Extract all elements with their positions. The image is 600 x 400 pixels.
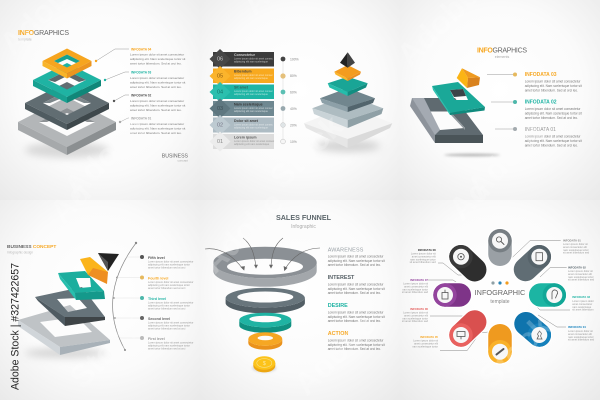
panel: step list and pyramid [210, 49, 392, 152]
layered pyramid [304, 52, 392, 152]
percent timeline: 80% [290, 74, 297, 78]
label: infodata 05 [412, 335, 438, 348]
callout: infodata 04: amet tortor bibendum. Sed at orci leo. [130, 61, 182, 65]
callout: infodata 02: amet tortor bibendum. Sed at orci leo. [525, 116, 578, 120]
label: infodata 04: INFODATA 04 [568, 325, 586, 329]
stage: action: ACTION [328, 331, 348, 337]
label: infodata 06: amet consectetur elit [404, 313, 428, 317]
label: infodata 01: INFODATA 01 [563, 238, 581, 242]
number diamonds: 06 [217, 56, 223, 62]
step rows: Nam scelerisque [234, 102, 263, 106]
panel: floating frames infographic [410, 48, 582, 156]
level: fifth: adipiscing elit nam scelerisque tortor [148, 262, 190, 266]
stock watermark: Adobe [459, 109, 555, 205]
callout: infodata 02: adipiscing elit. Nam scelerisque tortor sit [130, 103, 186, 107]
label: infodata 03: sit amet bibendum [572, 308, 594, 312]
stage: interest: adipiscing elit. Nam scelerisque tortor sit [328, 287, 385, 291]
percent timeline: 20% [290, 124, 297, 128]
label: infodata 04: Lorem ipsum dolor sit [568, 329, 593, 333]
label: infodata 01: nam scelerisque tortor [563, 248, 589, 252]
level: fourth: adipiscing elit nam scelerisque tortor [148, 283, 190, 287]
step rows: adipiscing elit nam scelerisque [234, 142, 270, 146]
level: fifth: amet tortor bibendum sed at orci [148, 266, 186, 270]
label: infodata 07: Lorem ipsum dolor sit [403, 282, 428, 286]
callout: infodata 01: amet tortor bibendum. Sed at orci leo. [525, 144, 578, 148]
step rows: Sit amet [234, 86, 249, 90]
callout: infodata 02: Lorem ipsum dolor sit amet consectetur [130, 99, 184, 103]
stage: interest: INTEREST [328, 275, 355, 281]
label: infodata 02: amet consectetur elit [568, 272, 592, 276]
level: second: amet tortor bibendum sed at orci [148, 326, 186, 330]
callout: infodata 03: INFODATA 03 [525, 72, 557, 78]
level: fifth [126, 255, 194, 270]
step rows: adipiscing elit nam scelerisque [234, 60, 269, 63]
stock watermark: Adobe [56, 109, 152, 205]
cylinder: top right slate [526, 245, 551, 270]
stage: interest [328, 275, 385, 295]
stage: interest: amet tortor bibendum. Sed at orci leo. [328, 291, 381, 295]
center title [475, 281, 525, 305]
icon: coin [252, 356, 276, 372]
step rows: Lorem ipsum dolor sit amet consec [234, 90, 274, 93]
level: fourth: amet tortor bibendum sed at orci [148, 286, 186, 290]
level: first: First level [148, 337, 165, 341]
callout: infodata 01: Lorem ipsum dolor sit amet consectetur [130, 122, 184, 126]
level: fifth: Fifth level [148, 256, 165, 260]
label: infodata 02: Lorem ipsum dolor sit [568, 269, 593, 273]
step rows: Lorem ipsum dolor sit amet consec [234, 74, 274, 77]
label: infodata 08: sit amet bibendum sed [410, 260, 436, 264]
callout: infodata 02: INFODATA 02 [131, 94, 152, 98]
exploded isometric frames [18, 253, 119, 358]
label: infodata 06: nam scelerisque tortor [402, 316, 428, 320]
center title: template [490, 299, 510, 305]
label: infodata 01: Lorem ipsum dolor sit [563, 242, 588, 246]
level: third: Lorem ipsum dolor sit amet consectetur [148, 300, 194, 304]
label: infodata 07 [402, 278, 429, 294]
title: Infographic [291, 224, 316, 230]
title: BUSINESS CONCEPT [7, 244, 56, 250]
label: infodata 05: INFODATA 05 [420, 335, 438, 339]
stage: desire [328, 303, 385, 323]
stage: awareness [328, 248, 385, 267]
number diamonds: 03 [217, 106, 223, 112]
business concept caption: BUSINESS [162, 154, 189, 160]
callout: infodata 04 [95, 48, 186, 65]
label: infodata 02: INFODATA 02 [568, 266, 586, 270]
stage: awareness: Lorem ipsum dolor sit amet consectetur [328, 254, 384, 258]
title [18, 30, 69, 42]
stage: interest: Lorem ipsum dolor sit amet consectetur [328, 282, 384, 286]
label: infodata 03: Lorem ipsum dolor [572, 299, 594, 303]
isometric frames and cube [410, 68, 500, 156]
stage: desire: Lorem ipsum dolor sit amet consectetur [328, 310, 384, 314]
level: fifth: Lorem ipsum dolor sit amet consectetur [148, 260, 194, 264]
label: infodata 06 [402, 307, 429, 323]
cylinder: bottom right blue [526, 323, 551, 347]
step rows [213, 52, 275, 149]
label: infodata 05: nam scelerisque tortor [412, 344, 438, 348]
label: infodata 03: INFODATA 03 [572, 295, 591, 299]
cylinder: right teal [541, 283, 566, 307]
callout: infodata 03: Lorem ipsum dolor sit amet consectetur [130, 76, 184, 80]
label: infodata 08: nam scelerisque tortor [410, 257, 436, 261]
callout: infodata 03: amet tortor bibendum. Sed at orci leo. [130, 85, 182, 89]
step rows: adipiscing elit nam scelerisque [234, 110, 269, 113]
label: infodata 03 [572, 295, 594, 312]
label: infodata 07: amet consectetur elit [404, 284, 428, 288]
step rows: adipiscing elit nam scelerisque [234, 77, 269, 80]
step rows: Lorem ipsum dolor sit amet consec [234, 58, 274, 60]
stage: action: adipiscing elit. Nam scelerisque tortor sit [328, 343, 385, 347]
level: fourth: Fourth level [148, 276, 168, 280]
callout: infodata 02: adipiscing elit. Nam scelerisque tortor sit [525, 112, 582, 116]
stage: desire: amet tortor bibendum. Sed at orci leo. [328, 319, 381, 323]
callout: infodata 03 [487, 72, 582, 92]
callout: infodata 03: INFODATA 03 [131, 70, 152, 74]
leader lines [428, 241, 570, 351]
level: third [114, 296, 194, 310]
label: infodata 01: amet consectetur elit [563, 245, 587, 249]
business concept caption: concept [177, 158, 188, 162]
cylinder: left purple [433, 283, 459, 307]
inflow arrows [205, 238, 320, 270]
label: infodata 06: sit amet bibendum sed [402, 319, 429, 323]
step rows: Lorem ipsum dolor sit amet consec [234, 124, 274, 126]
label: infodata 08: INFODATA 08 [418, 248, 436, 252]
callout: infodata 01: INFODATA 01 [525, 127, 556, 133]
cylinder: bottom left red [449, 322, 475, 347]
step rows: adipiscing elit nam scelerisque [234, 93, 269, 96]
label: infodata 01 [563, 238, 590, 255]
callout: infodata 04: Lorem ipsum dolor sit amet consectetur [130, 52, 184, 56]
stage: desire: DESIRE [328, 303, 348, 309]
level: second: Lorem ipsum dolor sit amet consectetur [148, 320, 194, 324]
title: INFOGRAPHICS [18, 30, 69, 37]
level: third: adipiscing elit nam scelerisque tortor [148, 304, 190, 308]
label: infodata 03: nam scelerisque [572, 305, 592, 309]
label: infodata 07: nam scelerisque tortor [402, 287, 428, 291]
label: infodata 06: INFODATA 06 [410, 307, 428, 311]
callout: infodata 03: adipiscing elit. Nam scelerisque tortor sit [525, 84, 582, 88]
callout: infodata 03: amet tortor bibendum. Sed at orci leo. [525, 88, 578, 92]
stacked isometric frames [18, 48, 116, 158]
label: infodata 05: Lorem ipsum dolor sit [413, 338, 438, 342]
callout: infodata 02 [491, 100, 582, 120]
percent timeline: 40% [290, 107, 297, 111]
stock watermark: Adobe [286, 306, 382, 400]
panel: business concept levels [7, 242, 194, 358]
step rows: Lorem ipsum dolor sit amet consec [234, 107, 274, 110]
label: infodata 07: INFODATA 07 [410, 278, 428, 282]
callout: infodata 03 [104, 70, 186, 89]
stage: awareness: AWARENESS [328, 248, 364, 254]
panel: stacked frames infographic [18, 30, 189, 162]
label: infodata 04: sit amet bibendum sed [568, 338, 595, 342]
number diamonds: 02 [217, 122, 223, 128]
label: infodata 07: sit amet bibendum sed [402, 290, 429, 294]
title [477, 48, 527, 59]
level: first: adipiscing elit nam scelerisque tortor [148, 344, 190, 348]
level: fourth: Lorem ipsum dolor sit amet consectetur [148, 280, 194, 284]
panel: sales funnel [205, 213, 385, 372]
callout: infodata 04: adipiscing elit. Nam scelerisque tortor sit [130, 57, 186, 61]
level: first: amet tortor bibendum sed at orci [148, 346, 186, 350]
level: first: Lorem ipsum dolor sit amet consectetur [148, 340, 194, 344]
percent timeline: 100% [290, 58, 299, 62]
level: second [115, 316, 194, 330]
label: infodata 05: amet consectetur elit [414, 341, 438, 345]
callout: infodata 02: INFODATA 02 [525, 100, 557, 106]
title: elements [495, 55, 509, 59]
label: infodata 04 [568, 325, 595, 342]
percent timeline [280, 57, 299, 144]
icon: coin: $ [263, 361, 266, 367]
title [7, 244, 56, 254]
level: third: amet tortor bibendum sed at orci [148, 306, 186, 310]
label: infodata 08: amet consectetur elit [412, 254, 436, 258]
stock watermark: Ad [441, 171, 497, 227]
level: second: Second level [148, 317, 170, 321]
label: infodata 02: nam scelerisque tortor [568, 275, 594, 279]
center title: INFOGRAPHIC [475, 288, 525, 297]
label: infodata 08: Lorem ipsum dolor sit [411, 252, 436, 256]
callout: infodata 01: amet tortor bibendum. Sed at orci leo. [130, 131, 182, 135]
callout: infodata 04: INFODATA 04 [131, 48, 152, 52]
callout: infodata 01 [495, 127, 582, 148]
callout: infodata 01: INFODATA 01 [131, 116, 152, 120]
cylinder: top left black [449, 245, 475, 270]
step rows: Lorem ipsum [234, 136, 257, 140]
funnel rings [213, 247, 317, 350]
cylinder: top grey [488, 229, 512, 254]
number diamonds: 04 [217, 90, 223, 96]
stage: desire: adipiscing elit. Nam scelerisque tortor sit [328, 315, 385, 319]
label: infodata 03: amet consectetur [572, 302, 592, 306]
number diamonds: 05 [217, 74, 223, 80]
title [276, 213, 332, 230]
step rows: Bibendum [234, 70, 252, 74]
stage: awareness: amet tortor bibendum. Sed at orci leo. [328, 263, 381, 267]
callout: infodata 02: Lorem ipsum dolor sit amet consectetur [525, 107, 581, 111]
title: INFOGRAPHICS [477, 48, 527, 54]
stock watermark: Ad [42, 174, 98, 230]
title: SALES FUNNEL [276, 213, 332, 222]
label: infodata 02: sit amet bibendum sed [568, 278, 595, 282]
callout: infodata 02 [113, 94, 186, 112]
vertical stock id: Adobe Stock | #327422657 [10, 263, 22, 390]
step rows: adipiscing elit nam scelerisque [234, 126, 269, 129]
percent timeline: 10% [290, 140, 297, 144]
stock watermark: Stock [471, 308, 559, 395]
label: infodata 08 [410, 248, 436, 264]
stage: action: Lorem ipsum dolor sit amet consectetur [328, 338, 384, 342]
number diamonds: 01 [217, 139, 223, 145]
callout: infodata 02: amet tortor bibendum. Sed at orci leo. [130, 108, 182, 112]
level: second: adipiscing elit nam scelerisque tortor [148, 324, 190, 328]
cylinder: bottom orange [488, 336, 512, 363]
level: third: Third level [148, 297, 166, 301]
label: infodata 04: amet consectetur elit [568, 332, 592, 336]
business concept caption [162, 154, 189, 162]
number diamonds [210, 49, 230, 152]
callout: infodata 01: adipiscing elit. Nam scelerisque tortor sit [525, 139, 582, 143]
stage: awareness: adipiscing elit. Nam scelerisque tortor sit [328, 259, 385, 263]
callout: infodata 03: Lorem ipsum dolor sit amet consectetur [525, 80, 581, 84]
callout: infodata 03: adipiscing elit. Nam scelerisque tortor sit [130, 80, 186, 84]
stock watermark: Stock [62, 308, 150, 395]
stock watermark: Stock [262, 108, 350, 195]
callout: infodata 01 [119, 116, 186, 135]
stage: action: amet tortor bibendum. Sed at orci leo. [328, 347, 381, 351]
step rows: Dolor sit amet [234, 119, 259, 123]
curved arrow axis [113, 242, 137, 351]
callout: infodata 01: adipiscing elit. Nam scelerisque tortor sit [130, 126, 186, 130]
panel: radial cylinders infographic [402, 229, 595, 363]
step rows: Lorem ipsum dolor sit amet consec [234, 139, 275, 143]
label: infodata 01: sit amet bibendum sed [563, 251, 590, 255]
level: fourth [117, 276, 194, 290]
title: template [18, 38, 32, 42]
percent timeline: 60% [290, 90, 297, 94]
stage: action [328, 331, 385, 351]
label: infodata 06: Lorem ipsum dolor sit [403, 310, 428, 314]
label: infodata 02 [568, 266, 595, 282]
step rows: Consectetur [234, 53, 256, 57]
label: infodata 04: nam scelerisque tortor [568, 335, 594, 339]
title: Infographic design [7, 250, 33, 254]
stock watermark: Adobe [194, 184, 290, 280]
level: first [120, 336, 194, 350]
callout: infodata 01: Lorem ipsum dolor sit amet consectetur [525, 134, 581, 138]
